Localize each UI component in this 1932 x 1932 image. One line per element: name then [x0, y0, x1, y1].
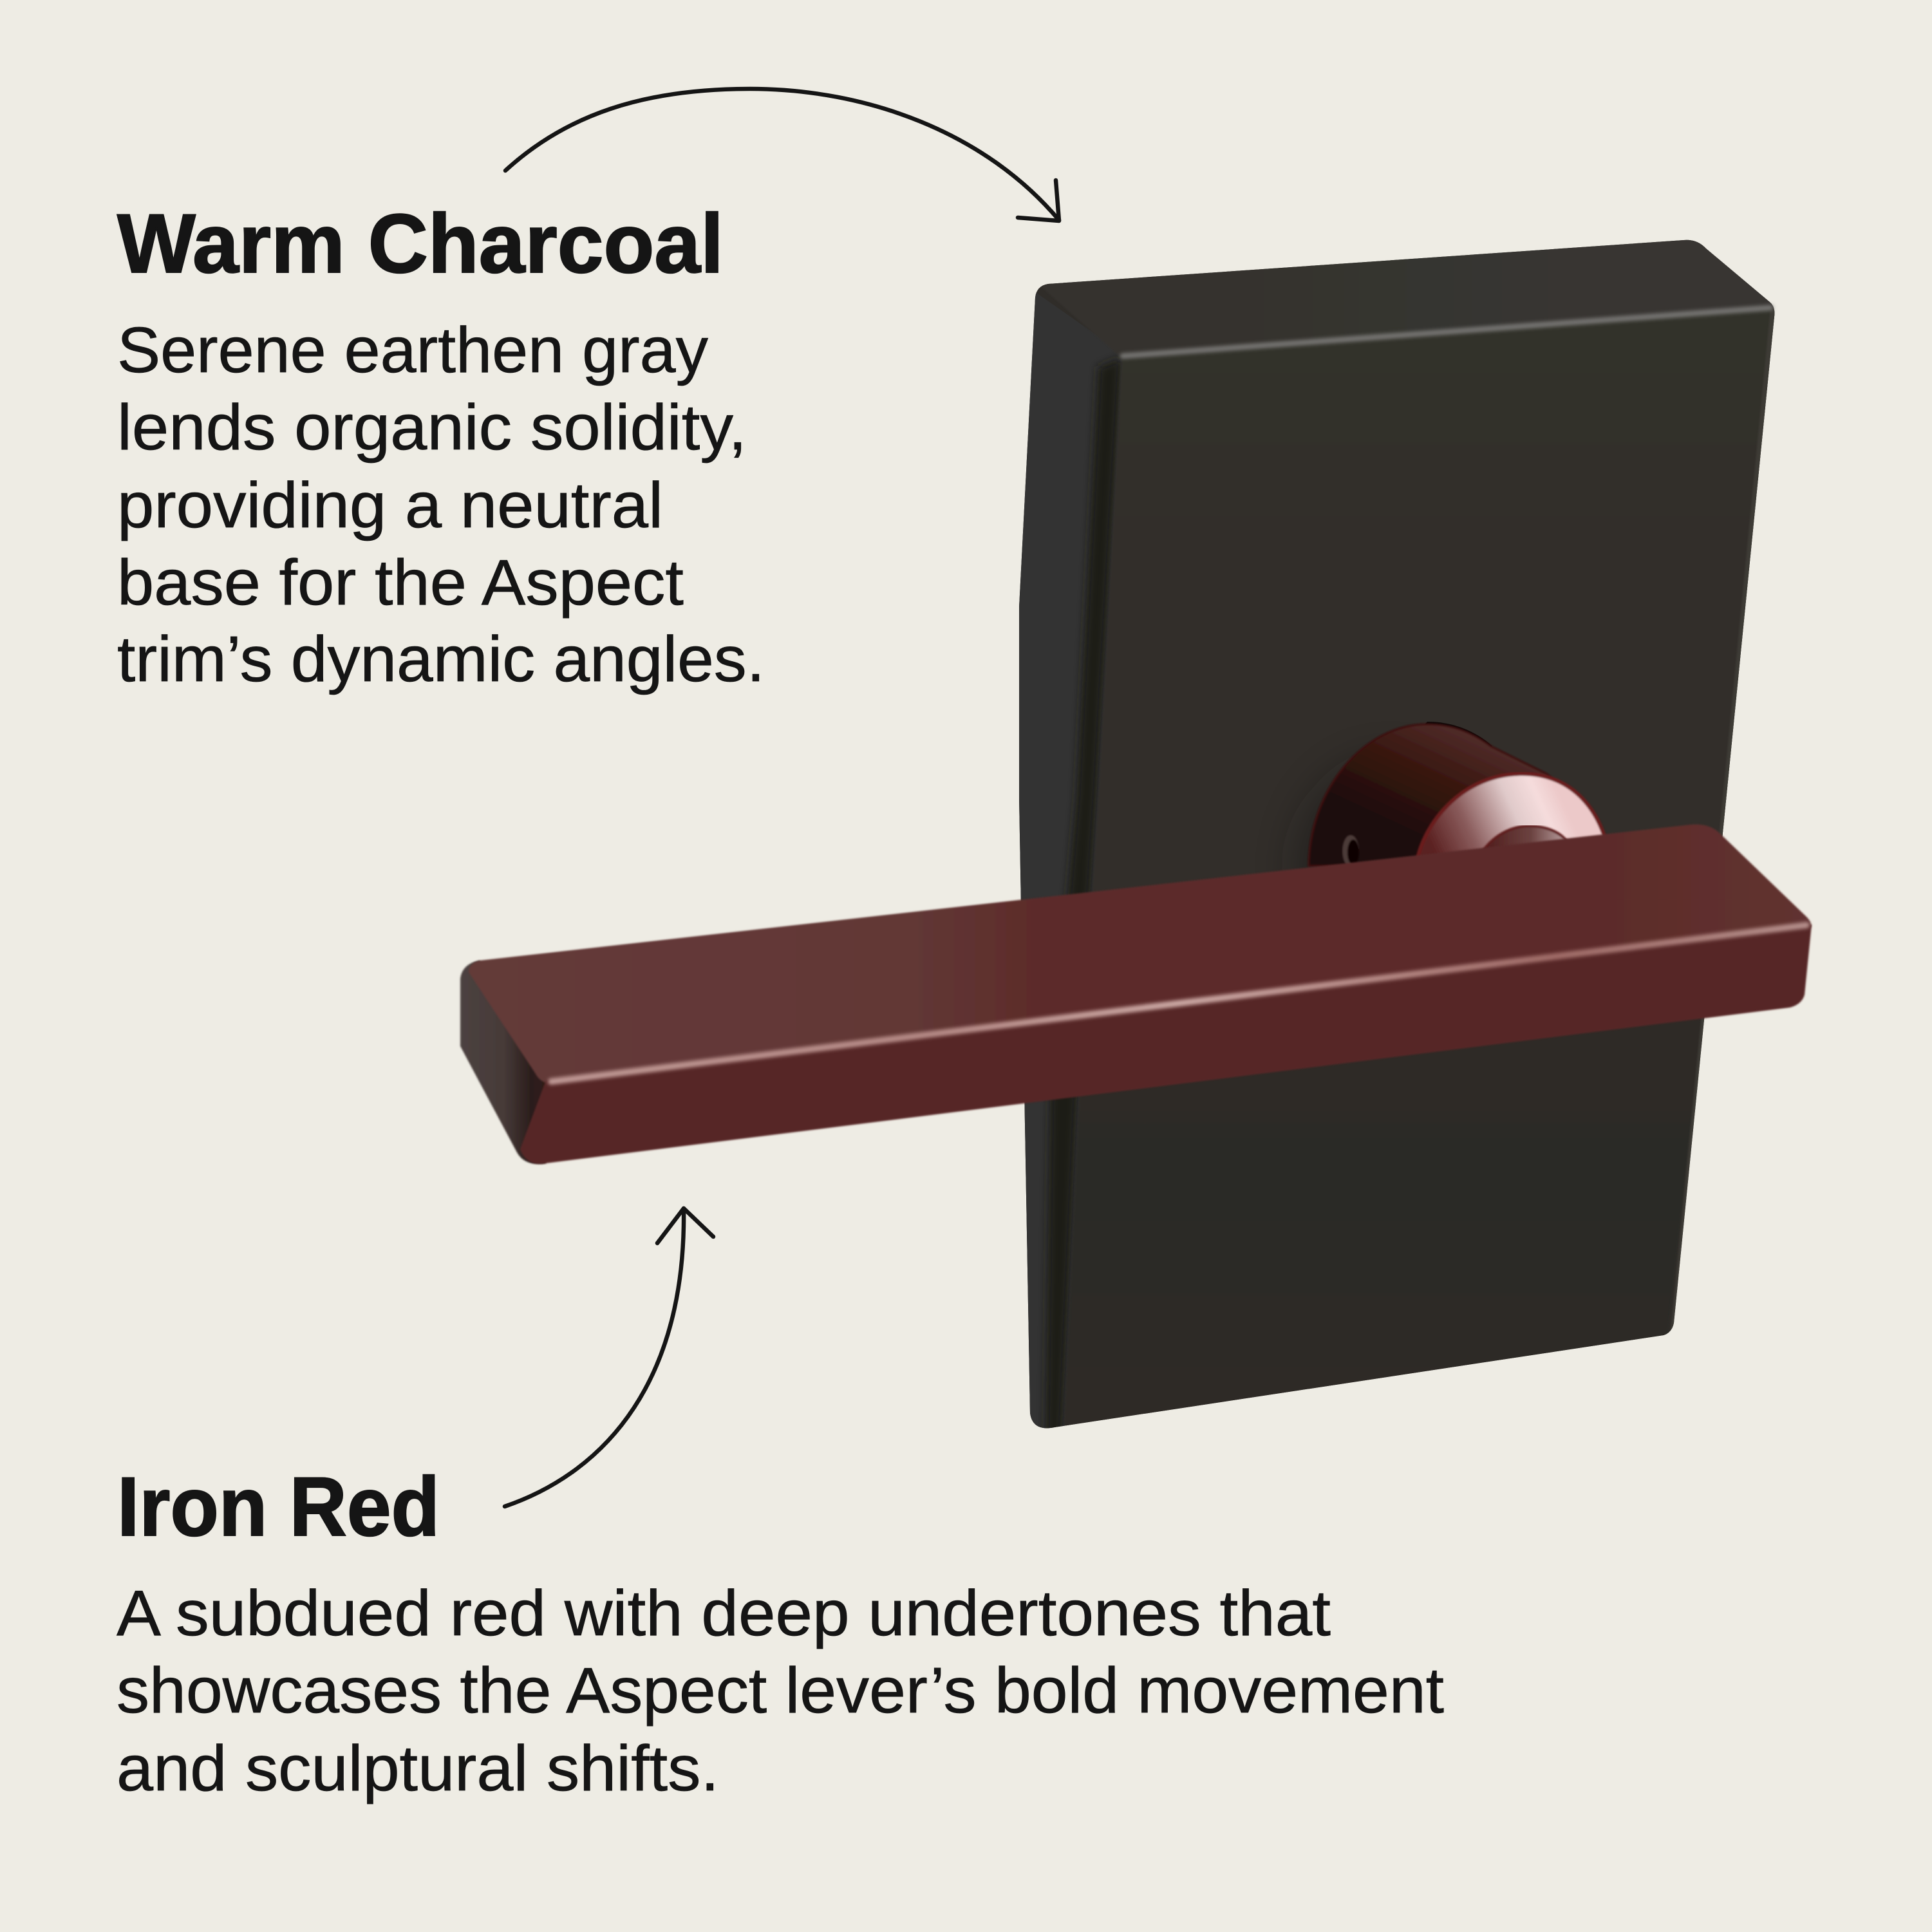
description — [117, 1577, 1444, 1805]
set screw hole — [1342, 835, 1359, 867]
description: base for the Aspect — [117, 547, 684, 619]
rose cylinder — [1309, 724, 1590, 866]
backplate: warm charcoal — [1004, 232, 1783, 1442]
heading: Warm Charcoal — [117, 196, 724, 290]
description: trim’s dynamic angles. — [117, 623, 765, 695]
lever end face — [460, 961, 554, 1164]
description: lends organic solidity, — [117, 391, 747, 464]
lever edge highlight — [551, 925, 1806, 1082]
description: providing a neutral — [117, 469, 663, 541]
plate top edge highlight — [1123, 308, 1770, 356]
lever: iron red — [460, 825, 1812, 1164]
illustration: lever door handle — [460, 232, 1812, 1442]
description: A subdued red with deep undertones that — [117, 1577, 1331, 1649]
rose face — [1416, 774, 1611, 866]
rose inner ring — [1479, 826, 1568, 856]
description: and sculptural shifts. — [117, 1732, 719, 1805]
heading: Iron Red — [117, 1459, 440, 1553]
lever mount: iron red rose — [1302, 722, 1606, 868]
lever top face — [469, 825, 1811, 1084]
description: showcases the Aspect lever’s bold movement — [117, 1655, 1444, 1727]
text block: warm charcoal — [117, 196, 765, 695]
description: Serene earthen gray — [117, 314, 708, 386]
lever front face — [520, 924, 1812, 1164]
arrow: to lever — [505, 1208, 713, 1506]
arrow: to backplate — [505, 89, 1059, 221]
description — [117, 314, 765, 695]
text block: iron red — [117, 1459, 1444, 1805]
